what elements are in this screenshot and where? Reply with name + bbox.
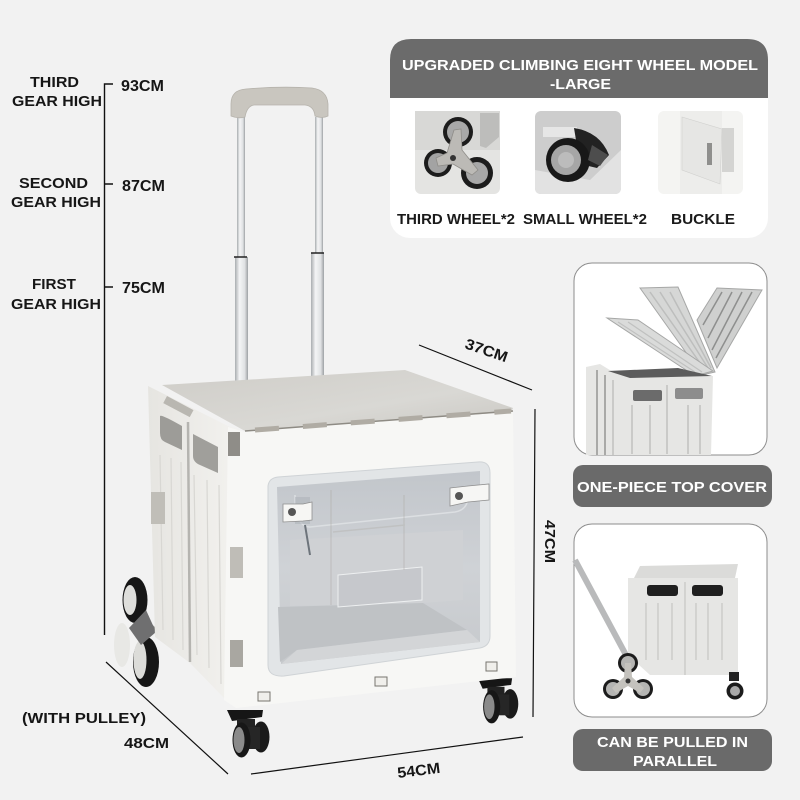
label: second gear high: SECOND — [19, 175, 88, 192]
captions: BUCKLE — [671, 211, 735, 228]
clear front door — [268, 462, 490, 676]
label: one-piece top cover: ONE-PIECE TOP COVER — [577, 479, 767, 496]
heading: -LARGE — [550, 76, 611, 93]
label: 37cm: 37CM — [463, 336, 510, 366]
height scale — [11, 74, 165, 635]
heading — [402, 57, 758, 93]
label: with pulley: (WITH PULLEY) — [22, 710, 146, 727]
side view cart — [628, 564, 738, 675]
label: 48cm: 48CM — [124, 735, 169, 752]
label: first gear high: FIRST — [32, 276, 76, 293]
label: one-piece top cover — [573, 465, 772, 507]
casters — [227, 678, 518, 758]
label: first gear high: GEAR HIGH — [11, 296, 101, 313]
side panel — [148, 386, 240, 708]
dimension lines: cart — [22, 336, 558, 782]
label: pulled in parallel — [573, 729, 772, 771]
heading: UPGRADED CLIMBING EIGHT WHEEL MODEL — [402, 57, 758, 74]
label: pulled in parallel: PARALLEL — [633, 753, 717, 770]
bottom vents — [258, 662, 497, 701]
lid leaves — [607, 287, 762, 376]
label: first gear high — [11, 276, 101, 313]
value: 75cm: 75CM — [122, 280, 165, 297]
lid — [162, 370, 513, 431]
corner latches — [228, 432, 243, 667]
captions: SMALL WHEEL*2 — [523, 211, 647, 228]
side handle slot: rear — [160, 416, 182, 450]
door latches — [283, 484, 489, 522]
label: pulled in parallel: CAN BE PULLED IN — [597, 734, 748, 751]
label: third gear high — [12, 74, 102, 110]
stair wheel — [603, 653, 653, 699]
captions: THIRD WHEEL*2 — [397, 211, 515, 228]
telescopic handle — [231, 87, 328, 381]
stair climbing wheel — [114, 577, 159, 687]
caster wheel — [726, 672, 744, 700]
label: second gear high — [11, 175, 101, 211]
tilted handle — [575, 560, 626, 655]
heading band — [390, 39, 768, 98]
panel: pulled in parallel — [574, 524, 767, 717]
label: 47cm: 47CM — [541, 520, 558, 563]
label: third gear high: THIRD — [30, 74, 79, 91]
lid hinges — [245, 411, 513, 431]
side handle slot: front — [193, 434, 218, 473]
photo: buckle — [658, 111, 743, 194]
label: 54cm: 54CM — [396, 760, 441, 782]
label: third gear high: GEAR HIGH — [12, 93, 102, 110]
side buckle — [151, 492, 165, 524]
photo: third wheel — [415, 111, 500, 194]
cart illustration — [114, 370, 518, 758]
value: 93cm: 93CM — [121, 78, 164, 95]
handle grip — [231, 87, 328, 118]
photo: small wheel — [535, 111, 621, 194]
value: 87cm: 87CM — [122, 178, 165, 195]
panel: one-piece top cover — [574, 263, 767, 455]
label: second gear high: GEAR HIGH — [11, 194, 101, 211]
front panel — [224, 410, 516, 708]
captions — [397, 211, 735, 228]
panel: wheel model — [390, 39, 768, 238]
open cart — [586, 364, 713, 455]
